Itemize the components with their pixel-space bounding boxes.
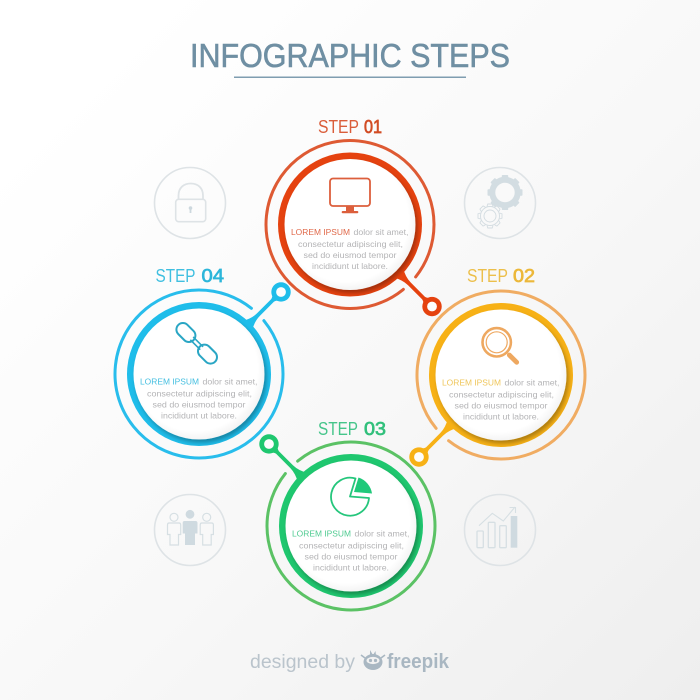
background icon: people <box>154 494 226 566</box>
step 01 circle <box>264 139 442 316</box>
connector with node <box>255 430 310 485</box>
step 04 heading: STEP <box>156 265 196 286</box>
background icon: bar chart <box>464 494 536 566</box>
step 02 heading: 02 <box>513 265 535 286</box>
step 01 text: sed do eiusmod tempor <box>304 250 397 260</box>
step 02 text <box>442 378 560 422</box>
small gear <box>478 204 502 228</box>
step 03 heading: 03 <box>364 418 386 439</box>
step 01 text: incididunt ut labore. <box>312 261 388 271</box>
step 03 text: incididunt ut labore. <box>313 562 389 572</box>
panel: step 02 <box>409 268 586 467</box>
background icon: lock <box>154 168 226 238</box>
step 04 text: consectetur adipiscing elit, <box>147 388 252 398</box>
center person <box>183 510 198 545</box>
step 03 heading: STEP <box>318 418 358 439</box>
step 03 text <box>292 528 410 572</box>
step 01 text: LOREM IPSUM <box>291 227 350 237</box>
step 02 text: consectetur adipiscing elit, <box>449 390 554 400</box>
title: INFOGRAPHIC STEPS <box>190 37 510 74</box>
step 01 text: consectetur adipiscing elit, <box>298 239 403 249</box>
colored ring <box>279 454 423 598</box>
step 04 text: dolor sit amet, <box>202 376 258 386</box>
icon: magnifier <box>482 328 517 362</box>
colored ring <box>278 152 422 296</box>
colored ring <box>429 303 573 447</box>
footer credit: freepik <box>387 651 450 673</box>
large gear <box>488 175 522 210</box>
side people <box>168 513 213 545</box>
step 03 text: sed do eiusmod tempor <box>304 552 398 562</box>
outer ring <box>233 408 469 644</box>
outer ring <box>232 106 468 343</box>
footer credit: designed by <box>250 652 356 673</box>
background icon: gears <box>464 168 536 238</box>
icon: monitor <box>330 178 370 213</box>
connector with node <box>405 416 460 471</box>
step 02 text: dolor sit amet, <box>504 378 560 388</box>
step 01 heading: 01 <box>364 116 382 137</box>
step 03 text: dolor sit amet, <box>354 528 410 538</box>
panel: step 03 <box>259 422 436 612</box>
step 01 heading: STEP <box>318 116 359 137</box>
step 04 circle <box>114 282 291 460</box>
step 02 text: incididunt ut labore. <box>463 412 539 422</box>
connector with node <box>240 278 295 333</box>
infographic canvas <box>114 44 700 700</box>
step 04 text <box>140 376 258 420</box>
outer ring <box>383 257 619 493</box>
step 03 text: LOREM IPSUM <box>292 528 351 538</box>
step 01 text <box>291 227 408 271</box>
step 02 text: LOREM IPSUM <box>442 378 501 388</box>
step 03 circle <box>259 434 436 612</box>
step 02 circle <box>409 290 586 467</box>
white disc <box>284 159 416 290</box>
icon: pie chart <box>331 478 372 516</box>
step 02 heading: STEP <box>467 265 508 286</box>
panel: step 01 <box>264 120 442 316</box>
step 04 text: LOREM IPSUM <box>140 376 199 386</box>
step 01 text: dolor sit amet, <box>354 227 408 237</box>
white disc <box>286 460 416 592</box>
connector with node <box>391 266 446 320</box>
step 03 text: consectetur adipiscing elit, <box>299 540 404 550</box>
outer ring <box>81 256 317 492</box>
step 04 text: sed do eiusmod tempor <box>152 400 246 410</box>
step 04 text: incididunt ut labore. <box>161 410 237 420</box>
step 02 text: sed do eiusmod tempor <box>454 400 548 410</box>
icon: chain link <box>174 320 220 366</box>
icon: freepik mascot <box>361 650 385 670</box>
step 04 heading: 04 <box>202 265 224 286</box>
white disc <box>134 308 264 440</box>
colored ring <box>127 302 271 446</box>
footer credit <box>250 650 450 673</box>
panel: step 04 <box>114 268 291 460</box>
white disc <box>436 310 566 440</box>
